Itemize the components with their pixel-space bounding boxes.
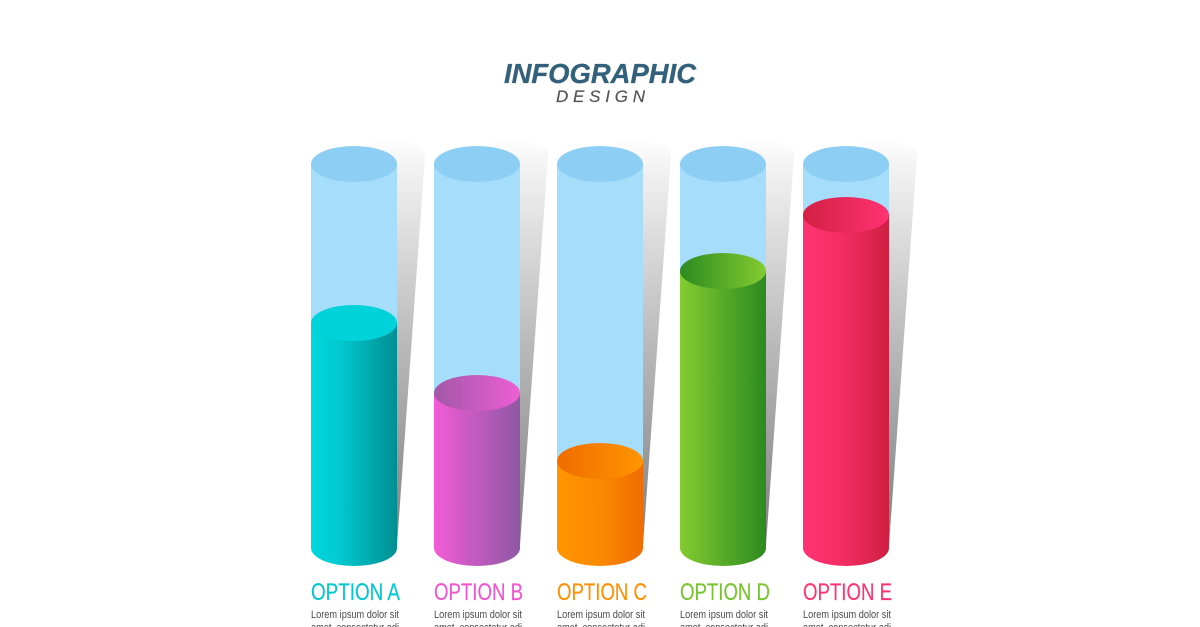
column: option D (680, 138, 794, 627)
fill top A (311, 305, 397, 341)
glass tube E (803, 164, 889, 225)
shadow E (862, 138, 917, 545)
fill top D (680, 253, 766, 289)
tube top C (557, 146, 643, 182)
fill top C (557, 443, 643, 479)
label B: OPTION B (434, 579, 523, 606)
glass tube D (680, 164, 766, 280)
fill top E (803, 197, 889, 233)
text E: Lorem ipsum dolor sit (803, 609, 891, 621)
shadow D (739, 138, 794, 545)
fill top B (434, 375, 520, 411)
text B (434, 609, 522, 627)
fill body A (311, 323, 397, 566)
text C: Lorem ipsum dolor sit (557, 609, 645, 621)
text E (803, 609, 891, 627)
text C (557, 609, 645, 627)
glass tube B (434, 164, 520, 400)
glass tube C (557, 164, 643, 470)
text A (311, 609, 399, 627)
label E: OPTION E (803, 579, 892, 606)
column: option E (803, 138, 917, 627)
column: option C (557, 138, 671, 627)
title: INFOGRAPHIC (504, 58, 697, 89)
fill body C (557, 461, 643, 566)
tube top B (434, 146, 520, 182)
text B: Lorem ipsum dolor sit (434, 609, 522, 621)
glass tube A (311, 164, 397, 330)
fill body D (680, 271, 766, 566)
shadow A (370, 138, 425, 545)
title: DESIGN (556, 87, 646, 106)
column: option B (434, 138, 548, 627)
fill body B (434, 393, 520, 566)
tube top A (311, 146, 397, 182)
label C: OPTION C (557, 579, 647, 606)
fill body E (803, 215, 889, 566)
tube top E (803, 146, 889, 182)
label A: OPTION A (311, 579, 400, 606)
text A: Lorem ipsum dolor sit (311, 609, 399, 621)
text D (680, 609, 768, 627)
column: option A (311, 138, 425, 627)
shadow C (616, 138, 671, 545)
label D: OPTION D (680, 579, 770, 606)
text D: Lorem ipsum dolor sit (680, 609, 768, 621)
title (504, 58, 697, 106)
shadow B (493, 138, 548, 545)
tube top D (680, 146, 766, 182)
